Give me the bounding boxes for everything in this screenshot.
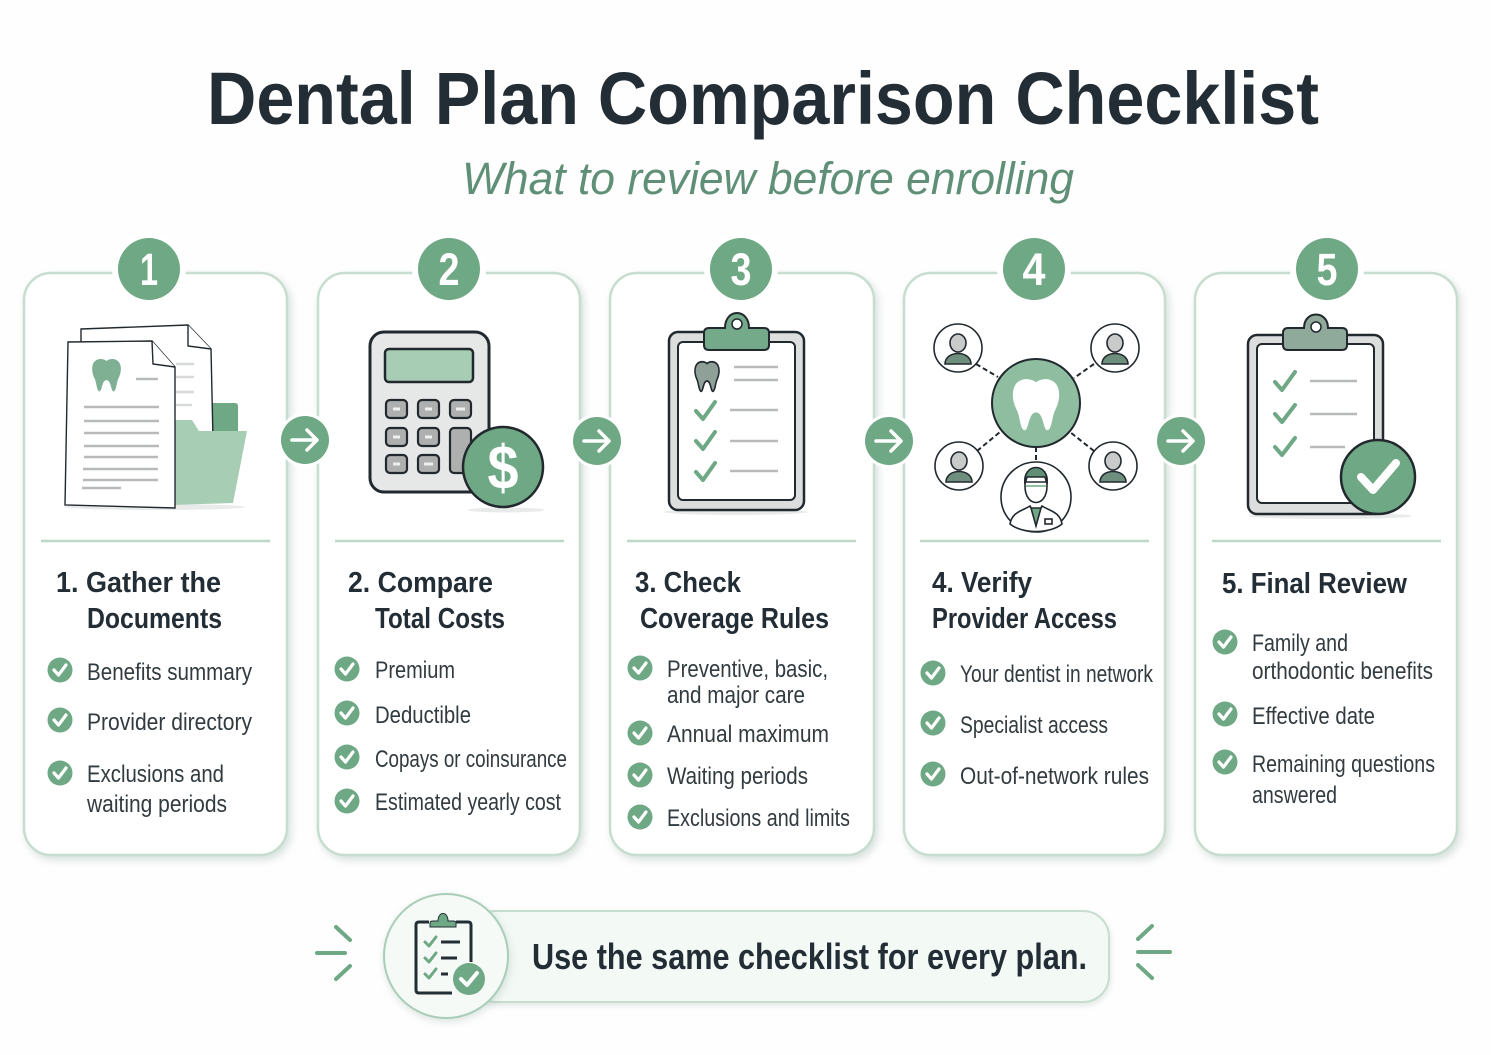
step 2 number badge [418, 238, 480, 300]
heading: 2. Compare [348, 567, 493, 599]
checklist items [48, 658, 252, 818]
checklist items: Family and [1252, 630, 1348, 657]
checklist items: Exclusions and limits [667, 805, 850, 832]
heading: 3. Check [635, 567, 742, 599]
step 5 number badge: 5 [1316, 244, 1338, 295]
step 5 number badge [1296, 238, 1358, 300]
panel: step 4 verify provider access [904, 232, 1165, 855]
heading [56, 567, 222, 635]
callout pill [470, 911, 1109, 1002]
checklist items: Annual maximum [667, 721, 829, 748]
icon: calculator with dollar coin: $ [488, 434, 518, 503]
checklist items: Waiting periods [667, 763, 808, 790]
checklist items [1212, 630, 1435, 809]
divider [920, 540, 1149, 542]
checklist items [920, 660, 1154, 790]
heading: Coverage Rules [640, 603, 829, 635]
checklist items: and major care [667, 682, 805, 709]
checklist items: Exclusions and [87, 761, 224, 788]
checklist items: Effective date [1252, 703, 1375, 730]
step 3 number badge: 3 [730, 244, 752, 295]
step 4 number badge: 4 [1022, 244, 1046, 295]
checklist items [334, 656, 567, 816]
checklist items: waiting periods [86, 791, 227, 818]
checklist items: Specialist access [960, 712, 1108, 739]
step 3 number badge [710, 238, 772, 300]
checklist items: Estimated yearly cost [375, 789, 561, 816]
heading: 1. Gather the [56, 567, 221, 599]
panel: step 5 final review [1195, 232, 1457, 855]
divider [627, 540, 856, 542]
panel: step 3 check coverage rules [610, 232, 874, 855]
step 1 number badge: 1 [140, 244, 158, 295]
arrow: step 1 to 2 [278, 413, 332, 467]
arrow: step 3 to 4 [862, 414, 916, 468]
checklist items: orthodontic benefits [1252, 658, 1433, 685]
callout text: Use the same checklist for every plan. [532, 936, 1087, 977]
step 2 number badge: 2 [438, 244, 460, 295]
heading: Documents [87, 603, 222, 635]
step 4 number badge [1003, 238, 1065, 300]
callout: use the same checklist [384, 894, 1109, 1018]
callout icon circle [384, 894, 508, 1018]
checklist items: Deductible [375, 702, 471, 729]
title: Dental Plan Comparison Checklist [207, 57, 1319, 140]
checklist items: Preventive, basic, [667, 656, 828, 683]
checklist items: Remaining questions [1252, 751, 1435, 778]
icon: clipboard with tooth and checks [664, 313, 808, 515]
heading [348, 567, 505, 635]
subtitle: What to review before enrolling [462, 153, 1074, 204]
panel: step 2 compare total costs [318, 232, 580, 855]
icon: calculator with dollar coin [370, 332, 544, 512]
checklist items [628, 656, 850, 832]
icon: left emphasis rays [317, 927, 350, 979]
heading: Total Costs [375, 603, 505, 635]
heading: 4. Verify [932, 567, 1032, 599]
checklist items: Provider directory [87, 709, 252, 736]
arrow: step 2 to 3 [570, 414, 624, 468]
checklist items: answered [1252, 782, 1337, 809]
heading [932, 567, 1117, 635]
checklist items: Premium [375, 657, 455, 684]
icon: documents and folder [65, 325, 247, 510]
panel: step 1 gather the documents [24, 232, 287, 855]
checklist items: Copays or coinsurance [375, 746, 567, 773]
icon: tooth network with people and dentist [934, 324, 1139, 532]
divider [335, 540, 564, 542]
icon: right emphasis rays [1138, 926, 1170, 978]
heading [635, 567, 829, 635]
divider [41, 540, 270, 542]
heading: Provider Access [932, 603, 1117, 635]
arrow: step 4 to 5 [1154, 414, 1208, 468]
step 1 number badge [118, 238, 180, 300]
icon: clipboard with large check [1248, 314, 1415, 519]
heading: 5. Final Review [1222, 568, 1407, 600]
checklist items: Benefits summary [87, 659, 252, 686]
checklist items: Your dentist in network [960, 661, 1154, 688]
divider [1212, 540, 1441, 542]
checklist items: Out-of-network rules [960, 763, 1149, 790]
